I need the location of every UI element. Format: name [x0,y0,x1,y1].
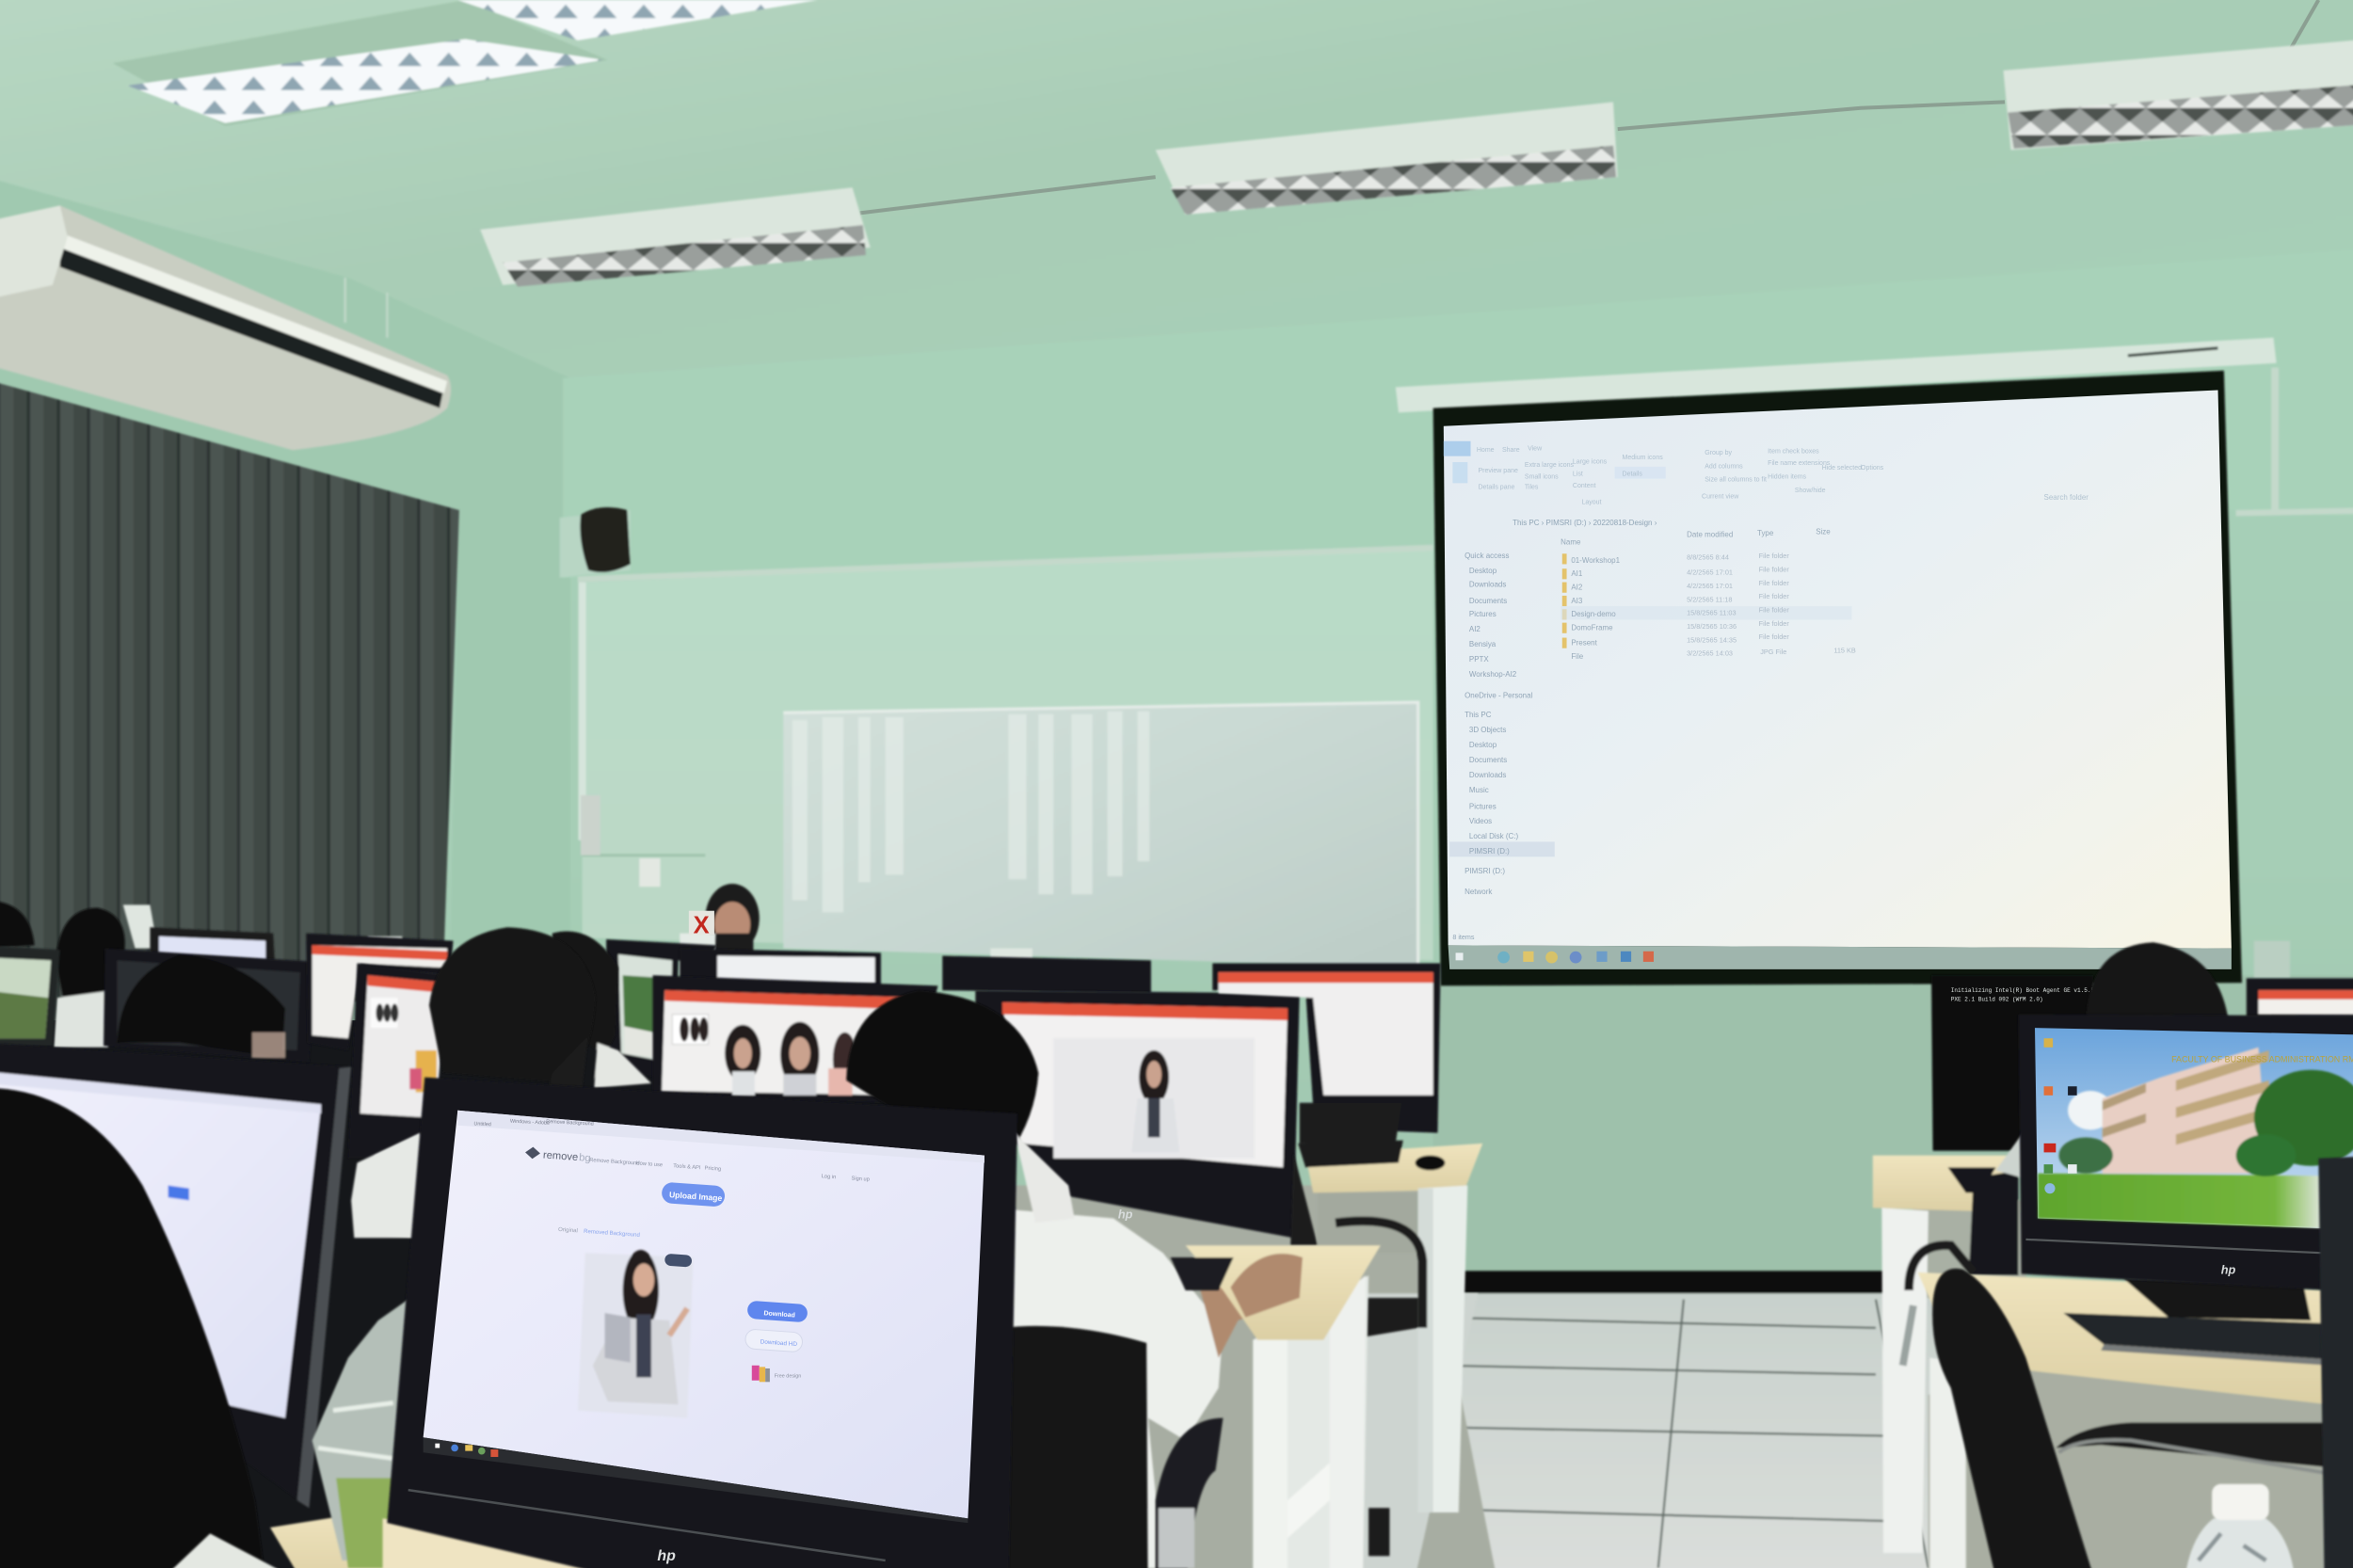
explorer navigation pane: Desktop [1469,567,1497,575]
explorer window ribbon: Item check boxes [1768,448,1819,455]
back row left students [0,901,125,1048]
remove.bg logo and nav [524,1146,871,1184]
right rear monitor with boot text: Initializing Intel(R) Boot Agent GE v1.5.50 [1951,987,2098,994]
explorer window ribbon: Current view [1702,493,1739,500]
explorer file list: JPG File [1760,648,1786,656]
monitor brand marks: hp [657,1548,676,1564]
browser tabs: Untitled [473,1121,491,1128]
remove.bg logo and nav: Log in [821,1174,836,1180]
explorer file list: Type [1757,529,1774,537]
explorer file list: Date modified [1687,531,1733,539]
speaker [560,507,631,578]
projector screen housing [1396,338,2277,412]
monitor: PowerPoint with one woman [975,990,1300,1238]
chair back: centre [998,1326,1223,1568]
explorer file list: File folder [1759,565,1789,573]
monitor: campus landscape rear [606,939,717,1080]
hp logo [2025,1240,2353,1277]
explorer window ribbon: Details pane [1478,485,1514,491]
explorer file list: File folder [1759,552,1789,560]
explorer window ribbon: Share [1502,447,1520,454]
ceiling light 3 [1156,102,1618,215]
explorer file list: Design-demo [1571,610,1616,618]
explorer file list: AI1 [1571,569,1583,578]
monitor: PowerPoint rear [306,934,454,1050]
X sign: X [694,913,710,939]
monitor: PowerPoint with thumbnails [348,964,450,1159]
backdrop under the centre desks [990,1185,1500,1568]
explorer file list: File folder [1759,605,1789,614]
edit pill [664,1254,692,1268]
sample image chips: Free design [775,1374,801,1380]
explorer file list: DomoFrame [1571,624,1613,632]
explorer window ribbon: Preview pane [1478,468,1518,474]
ceiling light 1 [113,0,818,126]
taskbar icons [1456,952,1654,964]
explorer file list: 15/8/2565 11:03 [1687,609,1737,617]
explorer window ribbon: Small icons [1525,474,1559,481]
water bottle [2184,1484,2296,1568]
explorer window ribbon: Search folder [2044,493,2089,502]
browser tabs: Windows - Adobe [510,1119,550,1127]
hp mark on centre monitor: hp [1118,1208,1133,1222]
shirt behind the gap between monitors [354,1133,424,1238]
explorer navigation pane: Videos [1469,817,1492,825]
window blinds [0,376,459,1050]
right rear monitor with boot text: PXE 2.1 Build 092 (WfM 2.0) [1951,996,2043,1002]
wallpaper scene [2038,1048,2353,1230]
hp logo: hp [2221,1263,2235,1277]
shirt collar [150,1533,318,1568]
upload button [661,1182,726,1208]
upload button: Upload Image [669,1190,723,1203]
explorer window ribbon: View [1528,445,1543,452]
student behind central student [552,932,651,1088]
explorer file list: 8/8/2565 8:44 [1687,553,1729,562]
explorer file list: 01-Workshop1 [1571,556,1621,565]
teacher behind monitors [705,884,760,954]
black office chair [1932,1269,2098,1568]
plastic bag with green drink [312,1300,408,1568]
explorer navigation pane: AI2 [1469,625,1481,633]
explorer navigation pane: Documents [1469,597,1507,605]
desk strip below the front monitor [383,1518,668,1568]
X sign [689,911,714,939]
explorer window ribbon: Add columns [1705,463,1743,470]
sample image chips [752,1366,801,1382]
monitor: rear centre right [942,956,1151,993]
remove.bg logo and nav: remove [543,1150,579,1163]
central student head and shirt [351,927,596,1238]
explorer navigation pane: Documents [1469,756,1507,764]
desk behind front row [270,1508,393,1568]
woman cut-out [578,1250,694,1418]
explorer navigation pane: Desktop [1469,741,1497,749]
explorer window ribbon: Details [1623,471,1642,477]
student at centre right [846,990,1303,1568]
explorer file list: 4/2/2565 17:01 [1687,568,1733,577]
explorer window ribbon: List [1573,471,1583,477]
tabs under upload: Original [558,1227,578,1234]
monitor brand marks [408,1490,886,1564]
explorer navigation pane: PIMSRI (D:) [1469,847,1510,856]
explorer window ribbon: Size all columns to fit [1705,477,1767,484]
explorer window ribbon: Tiles [1525,485,1539,491]
explorer navigation pane: Quick access [1465,552,1510,560]
explorer file list [1561,528,1856,661]
desk and keyboard: centre [1171,1245,1381,1568]
right edge monitor side [2318,1156,2353,1568]
explorer navigation pane: Downloads [1469,771,1506,779]
download buttons: Download HD [760,1338,798,1348]
tabs under upload [558,1227,640,1239]
explorer navigation pane: Downloads [1469,580,1506,588]
browser tabs: Remove Background [546,1119,594,1128]
explorer window ribbon: Hidden items [1768,474,1807,481]
explorer navigation pane: PPTX [1469,655,1489,664]
explorer file list: 4/2/2565 17:01 [1687,582,1733,590]
explorer file list: 5/2/2565 11:18 [1687,595,1732,603]
front monitor: remove.bg page [387,1078,1017,1568]
monitor: dark screen with student in front [104,949,315,1063]
tabs under upload: Removed Background [584,1229,640,1239]
air conditioner [0,205,451,450]
explorer file list: 3/2/2565 14:03 [1687,649,1733,658]
download buttons: Download [763,1310,795,1320]
explorer navigation pane: 3D Objects [1469,726,1506,734]
projector screen [1433,371,2242,985]
explorer navigation pane: Music [1469,786,1489,794]
explorer navigation pane: 8 items [1452,934,1475,941]
win taskbar [424,1437,968,1523]
explorer file list: File folder [1759,632,1789,641]
explorer file list: Size [1816,528,1831,536]
remove.bg logo and nav: Sign up [851,1176,870,1183]
explorer navigation pane: OneDrive - Personal [1465,691,1533,699]
right monitor: campus wallpaper [2018,1015,2353,1293]
explorer file list: 15/8/2565 10:36 [1687,622,1737,631]
explorer navigation pane: Workshop-AI2 [1469,670,1517,679]
wall switch and thermostat [581,795,661,887]
front left student hair [0,1088,267,1568]
explorer file list: 115 KB [1833,647,1856,655]
explorer window ribbon: Large icons [1573,459,1608,466]
explorer file list: File folder [1759,619,1789,628]
explorer file list: AI2 [1571,584,1583,592]
explorer file list: Present [1571,639,1598,648]
floor and baseboard [1171,1271,1951,1568]
explorer navigation pane: This PC [1465,711,1492,719]
monitor: back row left [150,927,275,960]
explorer window ribbon: Medium icons [1623,455,1663,461]
explorer navigation pane [1449,552,1555,941]
explorer file list: AI3 [1571,597,1583,605]
explorer window ribbon [1444,441,2089,506]
dark backdrop behind the monitor rows [0,1020,1020,1568]
left row: front monitor [0,1043,351,1508]
monitor: PowerPoint with three women [653,975,937,1103]
browser tabs [473,1115,594,1133]
remove.bg logo and nav: Pricing [704,1166,721,1173]
monitor: far left landscape [0,945,60,1046]
explorer address bar: This PC › PIMSRI (D:) › 20220818-Design › [1513,519,1657,527]
whiteboard [783,702,1418,968]
explorer window ribbon: Home [1477,447,1495,454]
repaint floor under desks [1268,1293,1478,1568]
right desk rear [1873,1133,2025,1553]
paper notes on monitors [123,904,2290,990]
right desk front [1918,1272,2329,1568]
explorer window ribbon: File name extensions [1768,460,1831,467]
explorer navigation pane: Pictures [1469,610,1497,618]
monitor: top rear centre [680,949,881,990]
right rear monitor with boot text [1931,975,2098,1151]
explorer window ribbon: Options [1861,465,1884,472]
desktop icons [2044,1038,2077,1193]
explorer file list: Name [1561,538,1581,547]
remove.bg logo and nav: How to use [635,1160,663,1168]
explorer navigation pane: Pictures [1469,802,1497,810]
ceiling light 2 [480,187,871,287]
remove.bg logo and nav: Remove Background [589,1158,640,1167]
explorer navigation pane: PIMSRI (D:) [1465,867,1505,875]
explorer navigation pane: Network [1465,888,1492,896]
explorer file list: 15/8/2565 14:35 [1687,635,1737,644]
explorer file list: File folder [1759,579,1789,587]
explorer window ribbon: Content [1573,483,1595,489]
explorer file list: File [1571,652,1584,661]
explorer window ribbon: Layout [1581,500,1602,506]
explorer window ribbon: Hide selected [1822,465,1862,472]
explorer window ribbon: Group by [1705,450,1733,456]
right rear student head [2086,942,2229,1020]
download buttons [744,1301,808,1352]
ceiling conduit [860,0,2318,213]
explorer navigation pane: Local Disk (C:) [1469,832,1519,840]
explorer window ribbon: Extra large icons [1525,462,1575,469]
monitor and desk: right of centre [1212,964,1482,1556]
right far monitor [2247,978,2353,1017]
ceiling light 4 [2004,38,2353,150]
remove.bg logo and nav: bg [579,1152,591,1164]
remove.bg logo and nav: Tools & API [673,1163,701,1171]
explorer file list: File folder [1759,592,1789,600]
explorer window ribbon: Show/hide [1795,488,1826,494]
explorer navigation pane: Bensiya [1469,640,1497,648]
